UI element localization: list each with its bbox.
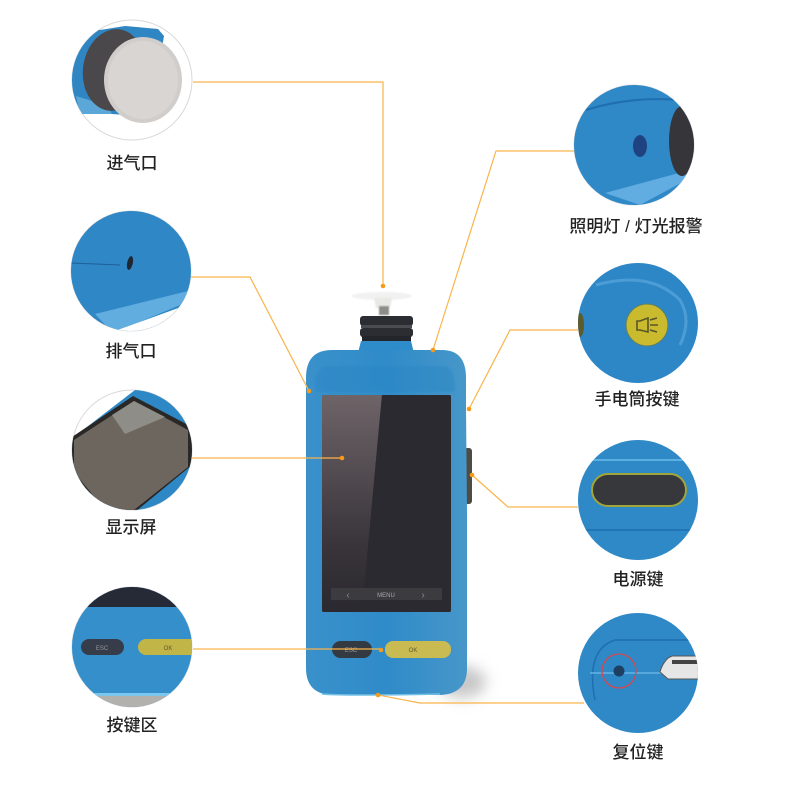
- callout line: reset key: [376, 693, 584, 703]
- device: screen menu bar: ›: [421, 590, 425, 601]
- panel: flashlight key: [576, 263, 698, 383]
- panel: display: [70, 390, 195, 512]
- panel: reset key: [578, 613, 700, 733]
- label: gas inlet: 进气口: [106, 154, 158, 173]
- panel: power key: [578, 440, 698, 560]
- callout line: light and alarm: [431, 151, 574, 352]
- device: screen menu bar: ‹: [346, 590, 350, 601]
- callout line: exhaust: [191, 277, 311, 393]
- label: display: 显示屏: [106, 518, 156, 537]
- device: screen menu bar: [331, 588, 442, 601]
- label: power key: 电源键: [612, 570, 664, 589]
- label: flashlight key: 手电筒按键: [594, 390, 680, 409]
- device: screen menu bar: MENU: [377, 593, 395, 599]
- main device: [306, 292, 486, 698]
- callout line: display: [192, 456, 344, 460]
- label: keypad: 按键区: [106, 716, 158, 735]
- device: ESC key: ESC: [345, 648, 358, 654]
- USB port: [660, 656, 700, 679]
- panel: light and alarm: [573, 84, 695, 206]
- callout line: power key: [470, 473, 578, 507]
- callout line: gas inlet: [193, 82, 385, 288]
- label: reset key: 复位键: [612, 742, 664, 762]
- keypad: ESC key: ESC: [96, 646, 109, 652]
- device: screen: [322, 395, 451, 612]
- device: gas inlet filter: [352, 292, 412, 315]
- flashlight key button: [626, 304, 668, 346]
- label: exhaust: 排气口: [106, 342, 156, 361]
- device: OK key: OK: [409, 648, 417, 654]
- power key button: [592, 474, 686, 506]
- keypad: OK key: OK: [164, 646, 172, 652]
- device: OK key: [385, 641, 451, 658]
- panel: keypad: [70, 585, 200, 710]
- device: blue body: [306, 350, 467, 695]
- callout line: keypad: [193, 648, 383, 652]
- device: side power button: [464, 448, 472, 504]
- device: ESC key: [332, 641, 372, 658]
- panel: gas inlet: [70, 20, 192, 140]
- reset hole with red ring: [602, 654, 636, 688]
- device: black collar: [360, 316, 413, 342]
- label: light and alarm: 照明灯 / 灯光报警: [569, 217, 703, 236]
- device: neck: [358, 341, 414, 353]
- callout line: flashlight key: [467, 330, 578, 411]
- panel: exhaust: [70, 210, 192, 332]
